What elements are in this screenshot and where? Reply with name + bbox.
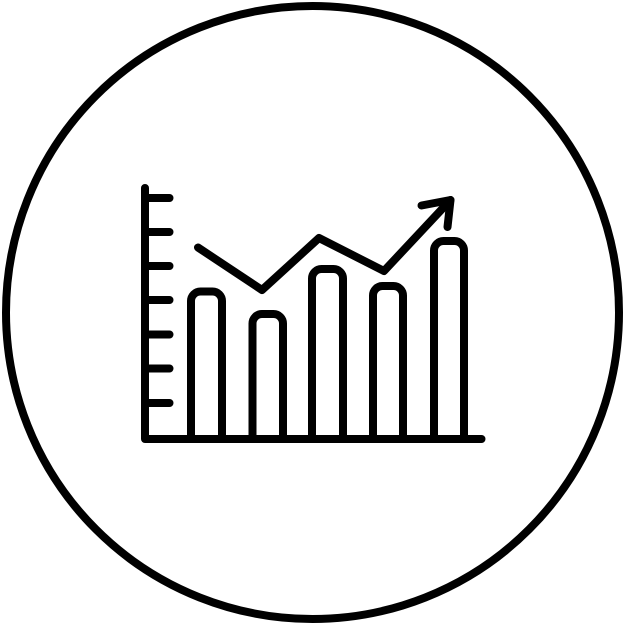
- trend arrow: [198, 200, 450, 290]
- chart axes and ticks: [145, 188, 482, 439]
- bars: [191, 241, 464, 438]
